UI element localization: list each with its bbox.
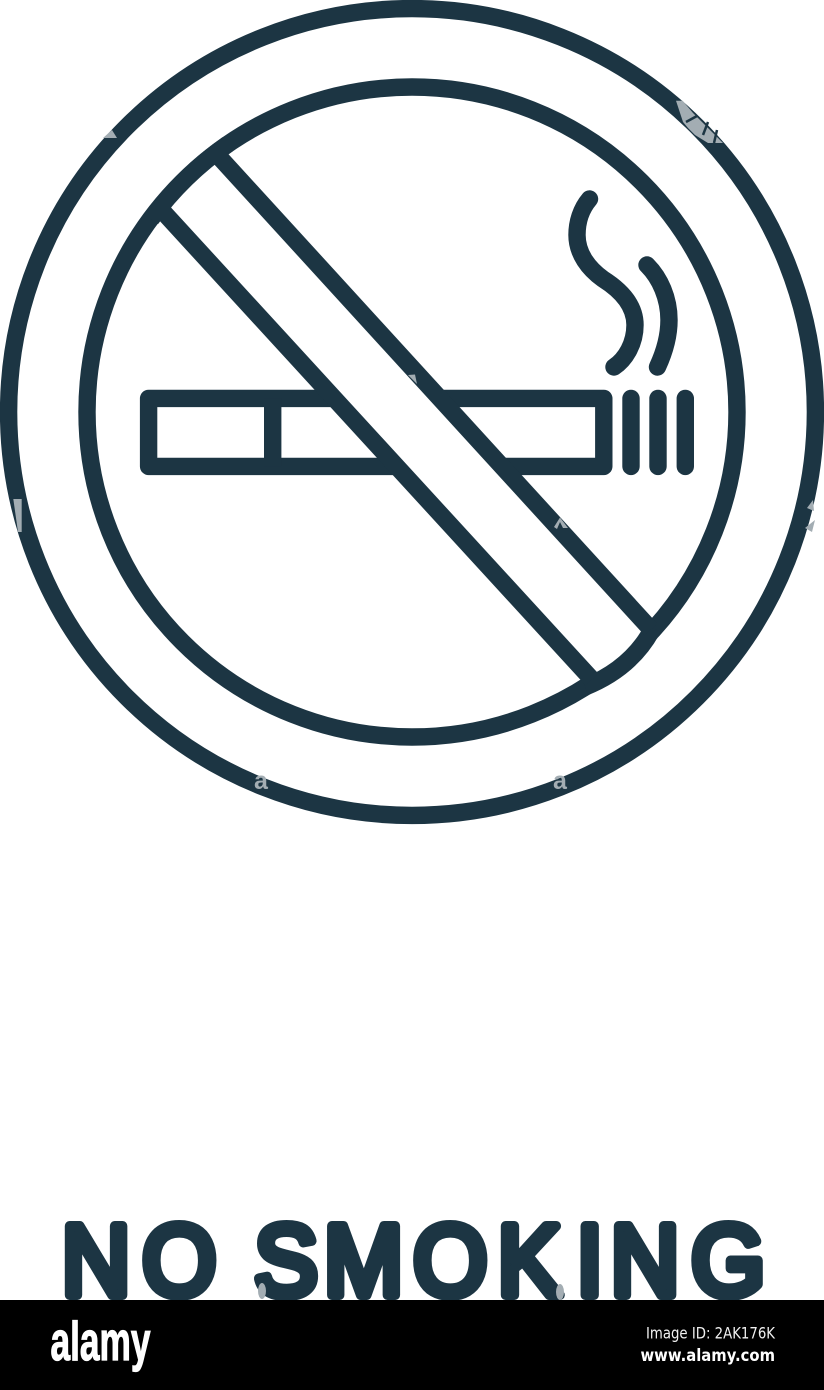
prohibition bar white band [166, 160, 651, 676]
inner circle arc at bar top [151, 144, 228, 219]
watermark fragments: a [553, 767, 568, 795]
prohibition bar upper line [218, 156, 651, 630]
title: NO SMOKING [62, 1205, 765, 1317]
footer bar [0, 1300, 824, 1390]
icon: no smoking sign [9, 9, 815, 815]
image id: Image ID: 2AK176K [646, 1324, 775, 1342]
icon: smoke wisps [577, 199, 669, 367]
inner circle bulge at bar end [585, 628, 653, 687]
inner circle [87, 87, 737, 737]
icon: cigarette ash lines [631, 398, 685, 466]
outer circle [9, 9, 815, 815]
logo: alamy: alamy [50, 1310, 151, 1372]
website: www.alamy.com [640, 1346, 775, 1366]
prohibition bar lower line [162, 210, 592, 680]
watermark fragments: a [254, 767, 269, 795]
icon: cigarette body [149, 398, 604, 466]
